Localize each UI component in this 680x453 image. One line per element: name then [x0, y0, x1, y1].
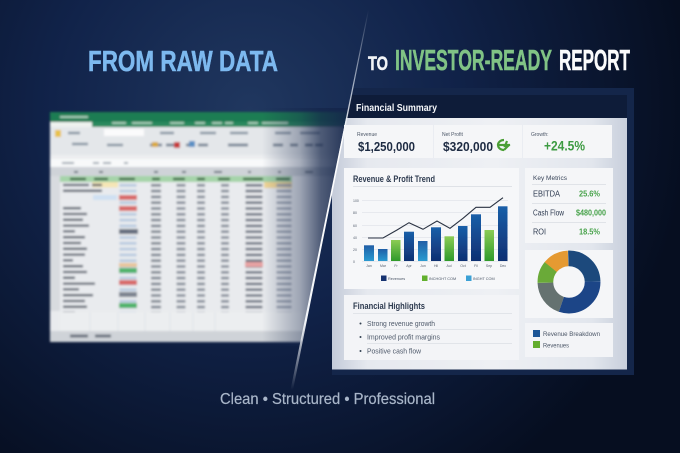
- panel: key metrics: [525, 168, 613, 243]
- panel: revenue and profit trend: Fil: [474, 264, 478, 268]
- chart legend: Revenues: [388, 277, 405, 281]
- KPI cards: [344, 125, 612, 158]
- KPI cards: $320,000: [443, 139, 493, 154]
- chart legend: INGHT COM: [473, 277, 495, 281]
- title right: to investor-ready report: TO: [368, 54, 388, 75]
- panel: donut chart: [525, 249, 613, 318]
- tagline: Clean • Structured • Professional: [220, 391, 435, 408]
- bars: [364, 206, 508, 261]
- panel: revenue legend: Revenue Breakdown: [543, 331, 600, 338]
- panel: financial highlights: Positive cash flow: [367, 346, 422, 356]
- panel: revenue and profit trend: Jun: [420, 264, 426, 268]
- title left: from raw data: FROM RAW DATA: [88, 46, 278, 78]
- panel: revenue and profit trend: 40: [353, 236, 357, 240]
- report panel frame: [332, 88, 634, 375]
- report heading: financial summary: Financial Summary: [356, 102, 437, 114]
- diagonal divider: [290, 10, 369, 390]
- panel: revenue and profit trend: 0: [353, 260, 355, 264]
- panel: revenue and profit trend: Dec: [500, 264, 506, 268]
- panel: financial highlights: [344, 295, 519, 360]
- KPI cards: Revenue: [357, 132, 377, 138]
- panel: key metrics: Cash Flow: [533, 208, 564, 218]
- panel: revenue and profit trend: 80: [353, 211, 357, 215]
- panel: revenue and profit trend: 20: [353, 248, 357, 252]
- panel: revenue and profit trend: Apr: [406, 264, 413, 268]
- spreadsheet name column: [63, 185, 95, 313]
- panel: revenue and profit trend: Fr: [394, 264, 398, 268]
- KPI cards: Growth:: [531, 132, 549, 138]
- panel: revenue and profit trend: Hil: [434, 264, 438, 268]
- title right: to investor-ready report: REPORT: [559, 45, 630, 77]
- spreadsheet: blurred raw data: [50, 108, 352, 346]
- panel: key metrics: 25.6%: [579, 190, 600, 198]
- title right: to investor-ready report: INVESTOR-READY: [395, 45, 552, 77]
- panel: financial highlights: Improved profit margins: [367, 332, 440, 342]
- icon: profit arrow: [498, 140, 510, 150]
- KPI cards: +24.5%: [544, 138, 585, 154]
- panel: revenue legend: [525, 323, 613, 357]
- panel: financial highlights: Strong revenue growth: [367, 319, 435, 328]
- spreadsheet title bar: [50, 112, 350, 122]
- panel: financial highlights: Financial Highlights: [353, 301, 425, 312]
- panel: revenue and profit trend: Oct: [460, 264, 466, 268]
- panel: revenue and profit trend: Aul: [446, 264, 452, 268]
- chart legend: INCHGHT COM: [429, 277, 456, 281]
- panel: revenue and profit trend: Sep: [486, 264, 492, 268]
- panel: key metrics: 18.5%: [579, 228, 600, 236]
- spreadsheet data columns: [128, 184, 284, 312]
- panel: key metrics: Key Metrics: [533, 175, 568, 182]
- panel: key metrics: ROI: [533, 228, 546, 236]
- panel: revenue and profit trend: Mar: [380, 264, 387, 268]
- KPI cards: Net Profit: [442, 132, 463, 138]
- panel: revenue and profit trend: Revenue & Profit Trend: [353, 174, 435, 184]
- panel: revenue and profit trend: Jan: [366, 264, 372, 268]
- panel: key metrics: EBITDA: [533, 188, 560, 198]
- report body: [332, 118, 627, 370]
- spreadsheet right fade: [266, 108, 348, 343]
- KPI cards: $1,250,000: [358, 139, 415, 154]
- panel: revenue and profit trend: 60: [353, 224, 357, 228]
- profit trend line: [368, 198, 503, 238]
- panel: revenue and profit trend: [344, 168, 519, 289]
- panel: key metrics: $480,000: [576, 208, 606, 218]
- panel: revenue and profit trend: 100: [353, 199, 359, 203]
- panel: revenue legend: Revenues: [543, 342, 570, 350]
- spreadsheet header row: [60, 176, 292, 182]
- chart legend: [381, 276, 495, 281]
